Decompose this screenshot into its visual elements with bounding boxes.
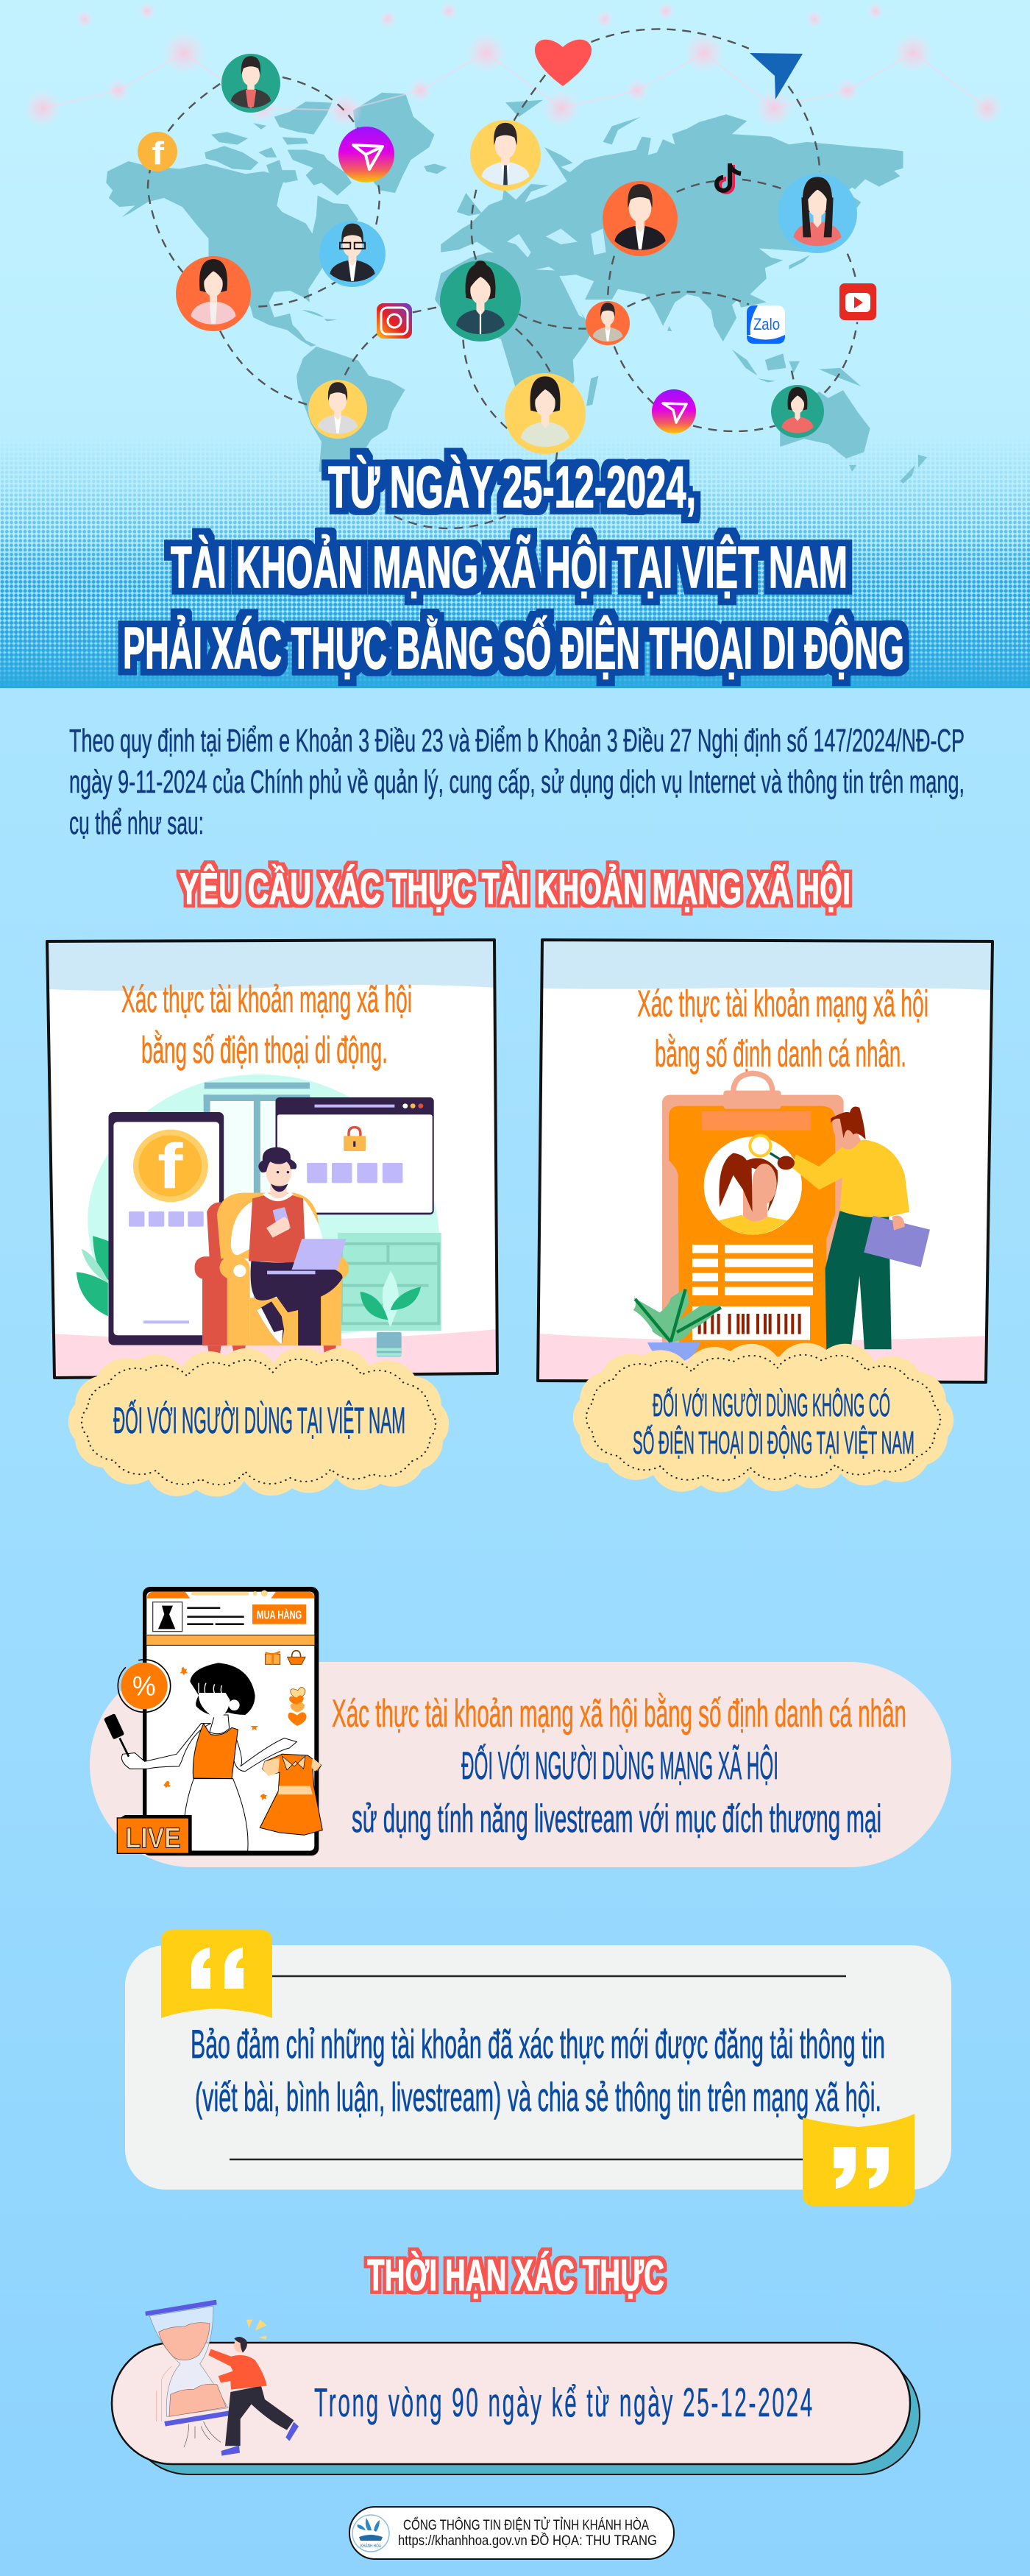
callout cloud: users without a Vietnamese phone number [573,1343,953,1492]
avatars [176,54,857,454]
footer credit: https://khanhhoa.gov.vn ĐỒ HỌA: THU TRANG [398,2533,657,2549]
icon: Khanh Hoa logo [352,2515,389,2552]
illustration: livestream phone: LIVE [126,1822,181,1855]
icon: Khanh Hoa logo: KHÁNH HÒA [360,2544,381,2549]
panel text [637,983,928,1075]
icon: opening quote [161,1930,272,2018]
callout cloud: users in Vietnam [68,1348,449,1496]
illustration: livestream phone [104,1587,322,1855]
illustration: man on armchair with phone: f [157,1130,183,1202]
world map: Eurasia, Africa and Oceania [435,100,927,484]
title [123,454,904,681]
icon: paper plane [750,53,803,99]
panel text: Xác thực tài khoản mạng xã hội [121,978,412,1020]
illustration: ID card and woman with magnifier [633,1073,930,1363]
icon: zalo [747,305,785,344]
panel: personal ID verification [538,940,992,1382]
quote panel [125,1930,951,2206]
header banner [0,0,1030,688]
world map: Americas and Greenland [106,93,482,472]
intro paragraph: cụ thể như sau: [69,805,204,841]
icon: instagram [377,303,412,339]
illustration: man on armchair with phone [77,1075,441,1372]
panel text: bằng số điện thoại di động. [141,1029,388,1071]
footer credit [349,2507,674,2559]
panel text [121,978,412,1071]
icon: facebook: f [152,135,164,171]
icon: closing quote [803,2114,914,2206]
halftone dot band [0,434,1030,688]
illustration: person pushing hourglass [145,2300,299,2456]
panel: phone verification [47,940,497,1378]
pink sparkle network [24,2,1004,128]
footer credit: CỔNG THÔNG TIN ĐIỆN TỬ TỈNH KHÁNH HÒA [403,2517,649,2533]
illustration: livestream phone: % [132,1671,156,1701]
dashed network connections [148,29,857,528]
icon: youtube [839,283,876,320]
icon: direct message purple [338,127,394,183]
intro paragraph [69,723,965,841]
heading: deadline: THỜI HẠN XÁC THỰC [367,2251,664,2300]
panel text [332,1692,906,1841]
divider lines [230,1976,846,2159]
panel: deadline pill [112,2300,920,2474]
title: TỪ NGÀY 25-12-2024, [328,454,696,520]
icon: tiktok [717,163,741,192]
icon: direct message purple small [652,389,696,434]
illustration: livestream phone: MUA HÀNG [257,1609,302,1621]
callout cloud: users in Vietnam: ĐỐI VỚI NGƯỜI DÙNG TẠI VIỆT NAM [113,1399,405,1441]
icon: facebook [138,132,177,171]
icon: zalo: Zalo [753,315,780,333]
quote text [191,2021,885,2120]
panel: livestream users [90,1587,951,1867]
icon: heart [535,40,592,86]
